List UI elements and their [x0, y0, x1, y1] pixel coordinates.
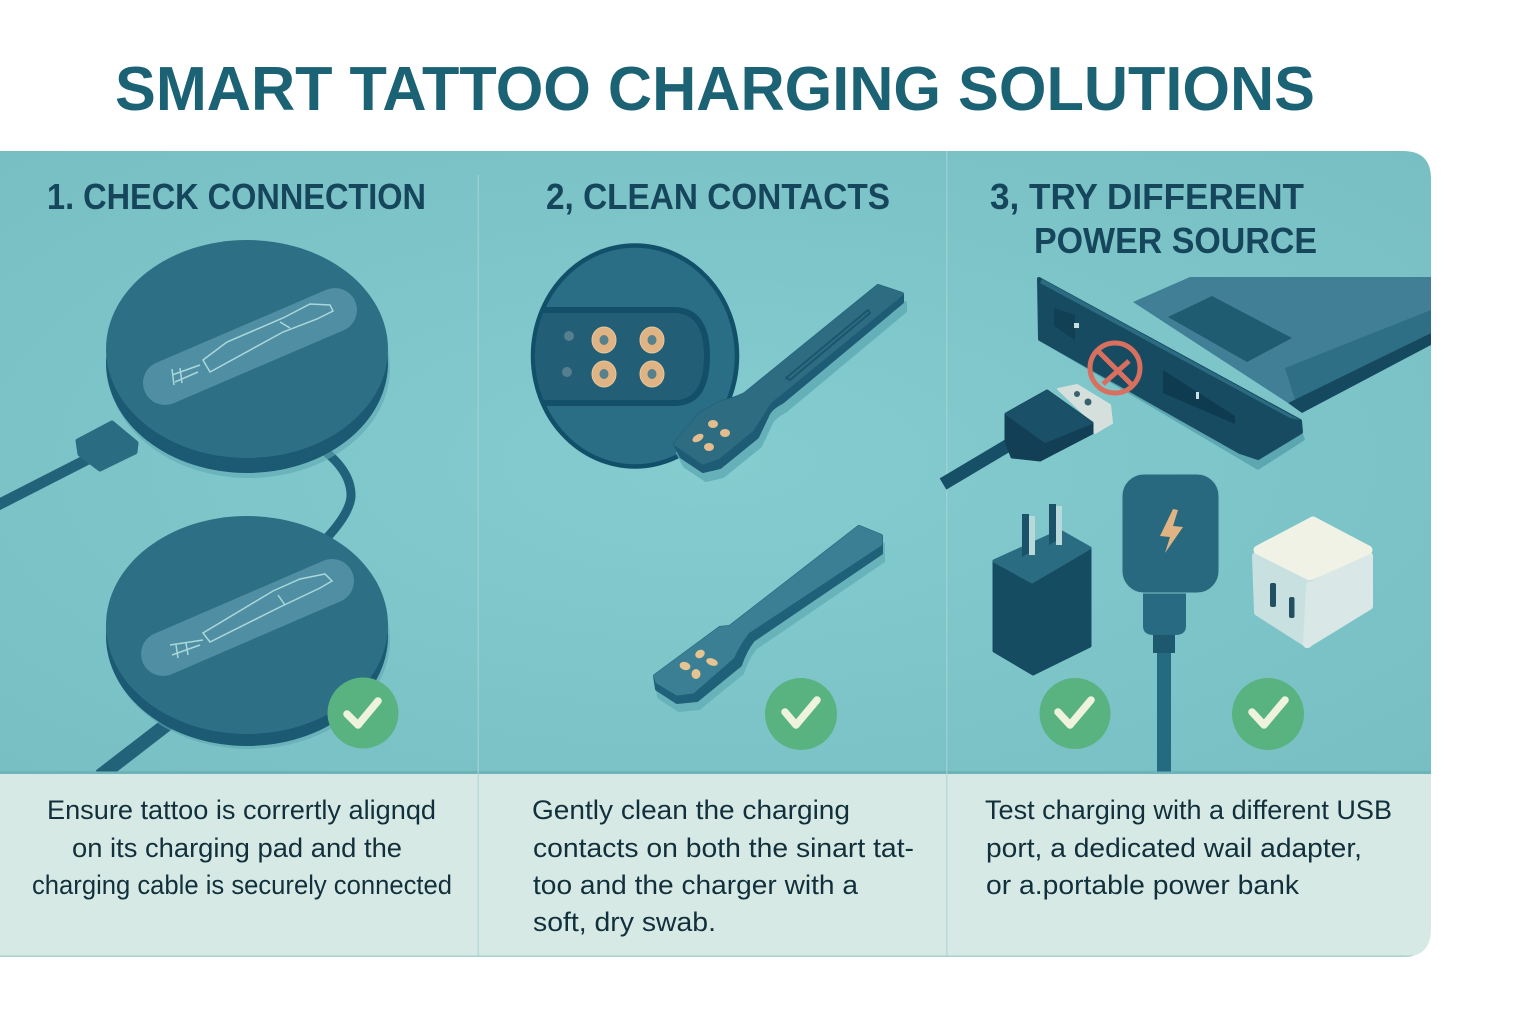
- check badge, power bank: [1232, 678, 1304, 750]
- panel: clean contacts: [530, 246, 905, 750]
- check badge: [765, 678, 837, 750]
- description: clean contacts: Gently clean the charging: [532, 795, 850, 825]
- swab with contacts, top: [675, 286, 905, 480]
- charging pad, bottom: [100, 516, 390, 776]
- description: check connection: [32, 795, 452, 900]
- heading: power source: POWER SOURCE: [1034, 220, 1317, 261]
- description: try different power source: or a.portable power bank: [986, 870, 1300, 900]
- white cube power bank: [1256, 521, 1369, 644]
- heading: check connection: 1. CHECK CONNECTION: [47, 176, 426, 217]
- description: try different power source: Test charging with a different USB: [985, 795, 1392, 825]
- description: clean contacts: too and the charger with a: [533, 870, 859, 900]
- description: try different power source: port, a dedicated wail adapter,: [986, 833, 1362, 863]
- check badge, wall charger: [1040, 678, 1110, 749]
- wall charger, dark: [994, 504, 1090, 674]
- main card: [0, 151, 1431, 957]
- panel: check connection: [0, 240, 398, 776]
- tattoo patch on bottom pad: [163, 574, 332, 658]
- magnified contacts circle: [530, 246, 737, 466]
- heading: clean contacts: 2, CLEAN CONTACTS: [546, 176, 890, 217]
- description: check connection: Ensure tattoo is corrertly alignqd: [47, 795, 436, 825]
- tattoo patch on top pad: [165, 304, 335, 385]
- description: check connection: on its charging pad and the: [72, 833, 402, 863]
- description: clean contacts: [532, 795, 914, 937]
- usb plug and cable: [0, 423, 136, 506]
- description: try different power source: [985, 795, 1392, 900]
- prohibition symbol: [1090, 343, 1140, 393]
- illustrations area: [0, 240, 1431, 776]
- description: clean contacts: contacts on both the sinart tat-: [533, 833, 914, 863]
- description: check connection: charging cable is securely connected: [32, 870, 452, 900]
- connecting cable between pads: [323, 451, 356, 538]
- title: SMART TATTOO CHARGING SOLUTIONS: [115, 55, 1315, 124]
- panel: try different power source: [943, 277, 1431, 773]
- usb plug, not working: [943, 385, 1112, 484]
- swab, cleaned, bottom: [655, 527, 883, 710]
- laptop: [1038, 277, 1431, 470]
- heading: try different: 3, TRY DIFFERENT: [990, 176, 1304, 217]
- lightning bolt: [1160, 509, 1183, 553]
- power adapter with lightning bolt and cable: [1122, 474, 1219, 773]
- charging pad, top: [106, 240, 390, 478]
- check badge: [328, 678, 398, 748]
- description: clean contacts: soft, dry swab.: [533, 907, 716, 937]
